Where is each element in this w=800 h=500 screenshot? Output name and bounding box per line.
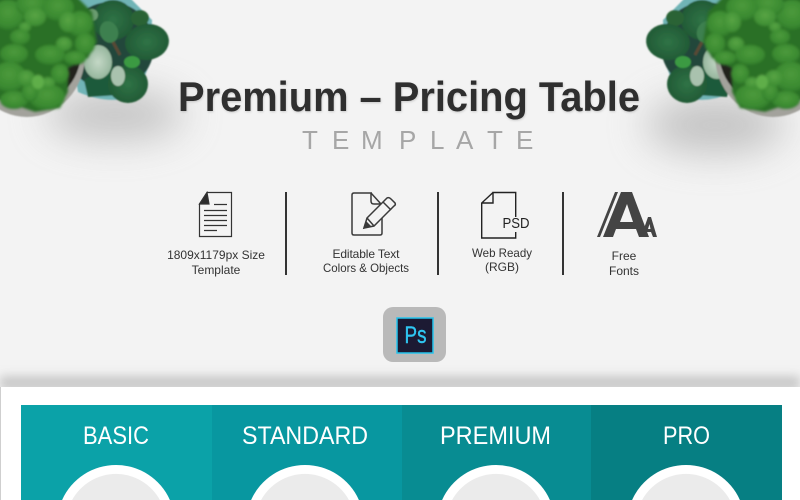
title: Premium – Pricing Table (178, 73, 640, 120)
feature: editable text: Colors & Objects (323, 261, 409, 275)
column: basic (21, 405, 212, 500)
divider (285, 192, 287, 275)
column: basic: BASIC (83, 422, 149, 450)
feature: editable text (323, 193, 409, 275)
plant shadow: right (645, 97, 785, 153)
feature: template size (167, 192, 265, 277)
feature: web ready (472, 192, 532, 274)
icon: PSD file: PSD (502, 215, 530, 232)
divider (562, 192, 564, 275)
icon: Ps logo: Ps (404, 322, 426, 349)
column: standard (212, 405, 402, 500)
icon: document (200, 192, 232, 236)
feature: web ready: (RGB) (485, 260, 519, 274)
column: premium: PREMIUM (440, 422, 551, 450)
icon: page with pencil (352, 193, 395, 235)
feature: free fonts: Fonts (609, 264, 639, 278)
subtitle: TEMPLATE (302, 125, 533, 155)
feature: template size: 1809x1179px Size (167, 248, 265, 262)
feature: free fonts (597, 192, 657, 278)
column: pro (591, 405, 782, 500)
divider (437, 192, 439, 275)
column: premium (402, 405, 591, 500)
card shadow (0, 376, 800, 390)
feature: editable text: Editable Text (332, 247, 400, 261)
column: standard: STANDARD (242, 422, 368, 450)
title: Premium – Pricing Table (178, 74, 640, 121)
plant shadow: left (45, 91, 185, 139)
badge circle (62, 465, 170, 500)
plants: top right (644, 0, 800, 117)
icon: font letters (597, 192, 657, 237)
plants: top left (0, 0, 171, 117)
badge circle (251, 465, 359, 500)
photoshop badge (383, 307, 446, 362)
feature: template size: Template (192, 263, 241, 277)
column: pro: PRO (663, 422, 710, 450)
pricing card (0, 387, 800, 500)
badge circle (632, 465, 740, 500)
feature: free fonts: Free (612, 249, 637, 263)
feature: web ready: Web Ready (472, 246, 532, 260)
badge circle (442, 465, 550, 500)
